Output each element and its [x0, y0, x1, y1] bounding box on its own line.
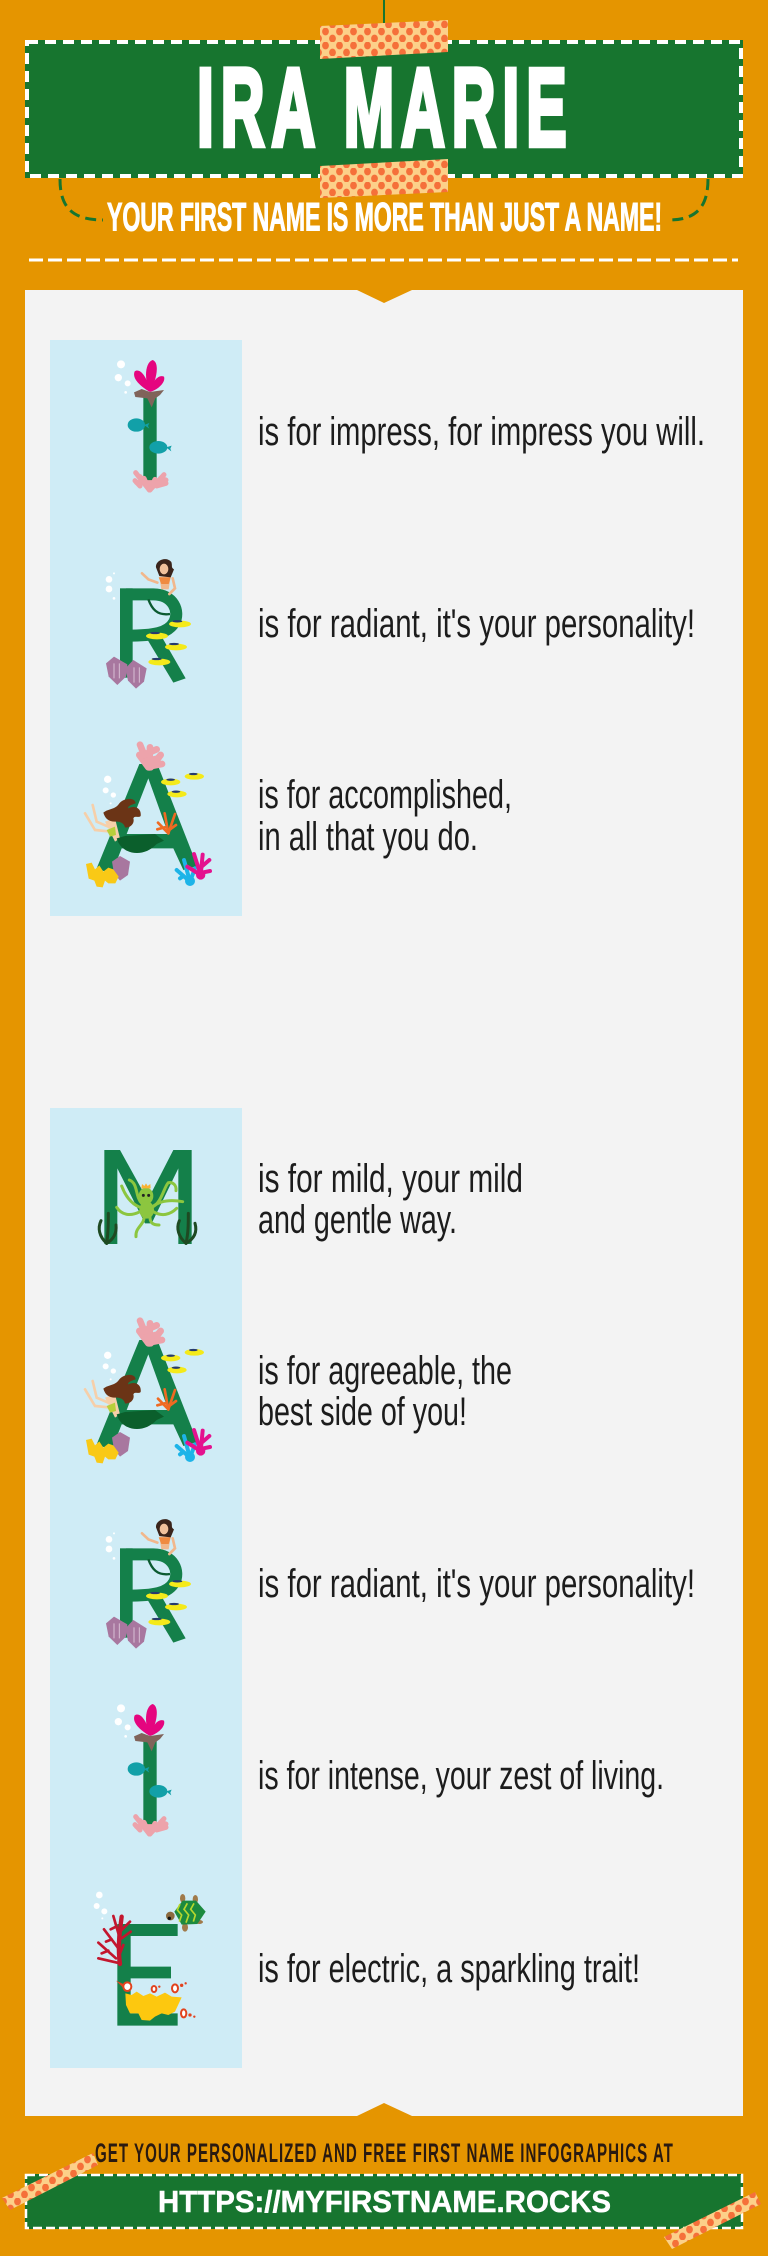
text: M: and gentle way. [258, 1198, 457, 1242]
tape: top [320, 20, 448, 59]
tape: footer left [2, 2153, 98, 2210]
footer call to action: GET YOUR PERSONALIZED AND FREE FIRST NAME INFOGRAPHICS AT [95, 2137, 673, 2168]
tape: footer right [664, 2192, 761, 2249]
letter M illustration [99, 1150, 196, 1244]
letter R illustration [106, 559, 191, 689]
panel: main paper [25, 290, 743, 2116]
header banner [25, 40, 743, 178]
text: A: in all that you do. [258, 815, 478, 859]
curved connector: right [669, 179, 708, 220]
text: M: is for mild, your mild [258, 1157, 523, 1201]
letter I illustration [115, 1704, 172, 1834]
subtitle: YOUR FIRST NAME IS MORE THAN JUST A NAME! [107, 194, 662, 239]
header hanging line [383, 0, 385, 24]
column: MARIE letters background [50, 1108, 242, 2068]
text: A: is for accomplished, [258, 773, 512, 817]
letter R illustration [106, 1519, 191, 1649]
letter E illustration [94, 1892, 206, 2026]
text: M [258, 1157, 523, 1242]
text: A: is for agreeable, the [258, 1349, 512, 1393]
URL: HTTPS://MYFIRSTNAME.ROCKS [158, 2184, 611, 2219]
text: A [258, 773, 512, 859]
letter I illustration [115, 360, 172, 490]
tape: bottom [320, 159, 448, 198]
footer banner [25, 2174, 743, 2229]
letter A illustration [85, 745, 210, 887]
curved connector: left [60, 179, 103, 220]
text: A: best side of you! [258, 1390, 467, 1434]
letter A illustration [85, 1321, 210, 1463]
text: A [258, 1349, 512, 1434]
column: IRA letters background [50, 340, 242, 916]
title: IRA MARIE [197, 46, 567, 169]
